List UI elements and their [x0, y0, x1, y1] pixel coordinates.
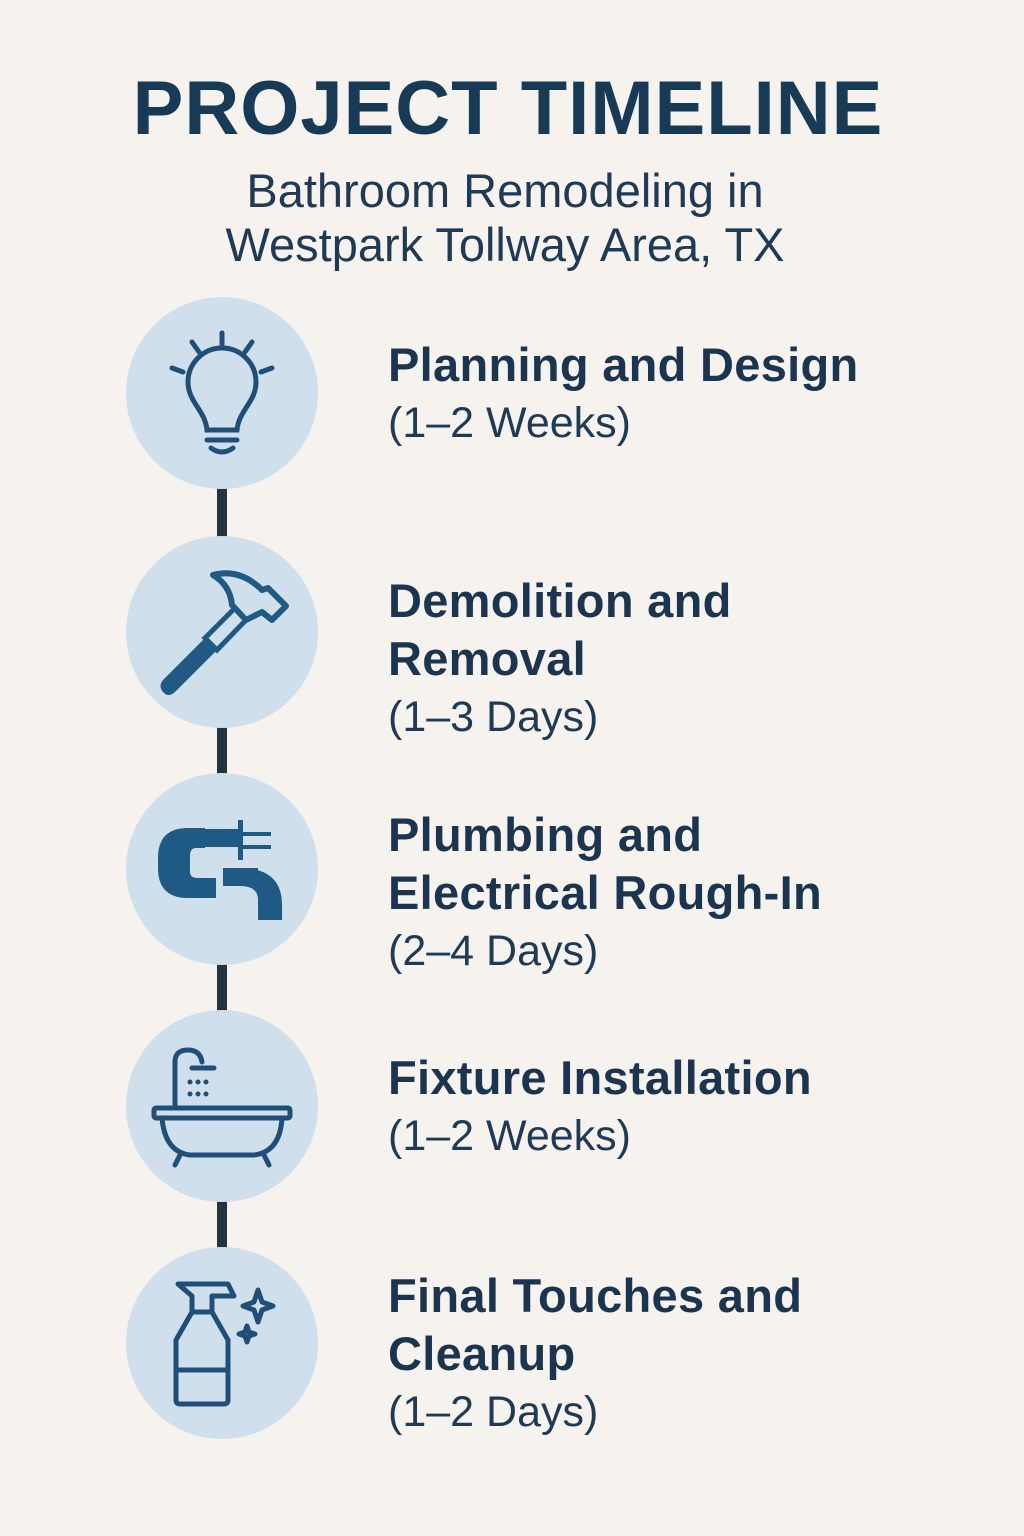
step 1 text: (1–2 Weeks) — [388, 399, 631, 447]
step 2 text: (1–3 Days) — [388, 693, 598, 741]
icon: light bulb — [172, 333, 272, 452]
step 2 text: Demolition and — [388, 574, 732, 627]
icon: bathtub — [154, 1050, 290, 1165]
subtitle: Bathroom Remodeling in — [246, 164, 764, 217]
step 5 text — [388, 1269, 802, 1436]
circles — [126, 297, 318, 1439]
icon: spray bottle — [176, 1284, 273, 1404]
icon: hammer — [160, 573, 286, 695]
step 3 text — [388, 808, 822, 975]
step 2 text: Removal — [388, 632, 586, 685]
icon: plumbing and electrical — [158, 820, 282, 920]
step 4 text: Fixture Installation — [388, 1051, 812, 1104]
subtitle: Westpark Tollway Area, TX — [225, 218, 785, 271]
step 5 text: Final Touches and — [388, 1269, 802, 1322]
step 2 text — [388, 574, 732, 741]
step 3 text: (2–4 Days) — [388, 927, 598, 975]
subtitle — [225, 164, 785, 271]
step 5 text: Cleanup — [388, 1327, 576, 1380]
step 4 text — [388, 1051, 812, 1160]
step 4 text: (1–2 Weeks) — [388, 1112, 631, 1160]
step 5 text: (1–2 Days) — [388, 1388, 598, 1436]
step 3 text: Electrical Rough-In — [388, 866, 822, 919]
step 3 text: Plumbing and — [388, 808, 702, 861]
connectors — [217, 488, 227, 1250]
title: PROJECT TIMELINE — [133, 66, 883, 151]
step 1 text: Planning and Design — [388, 338, 859, 391]
step 1 text — [388, 338, 859, 447]
